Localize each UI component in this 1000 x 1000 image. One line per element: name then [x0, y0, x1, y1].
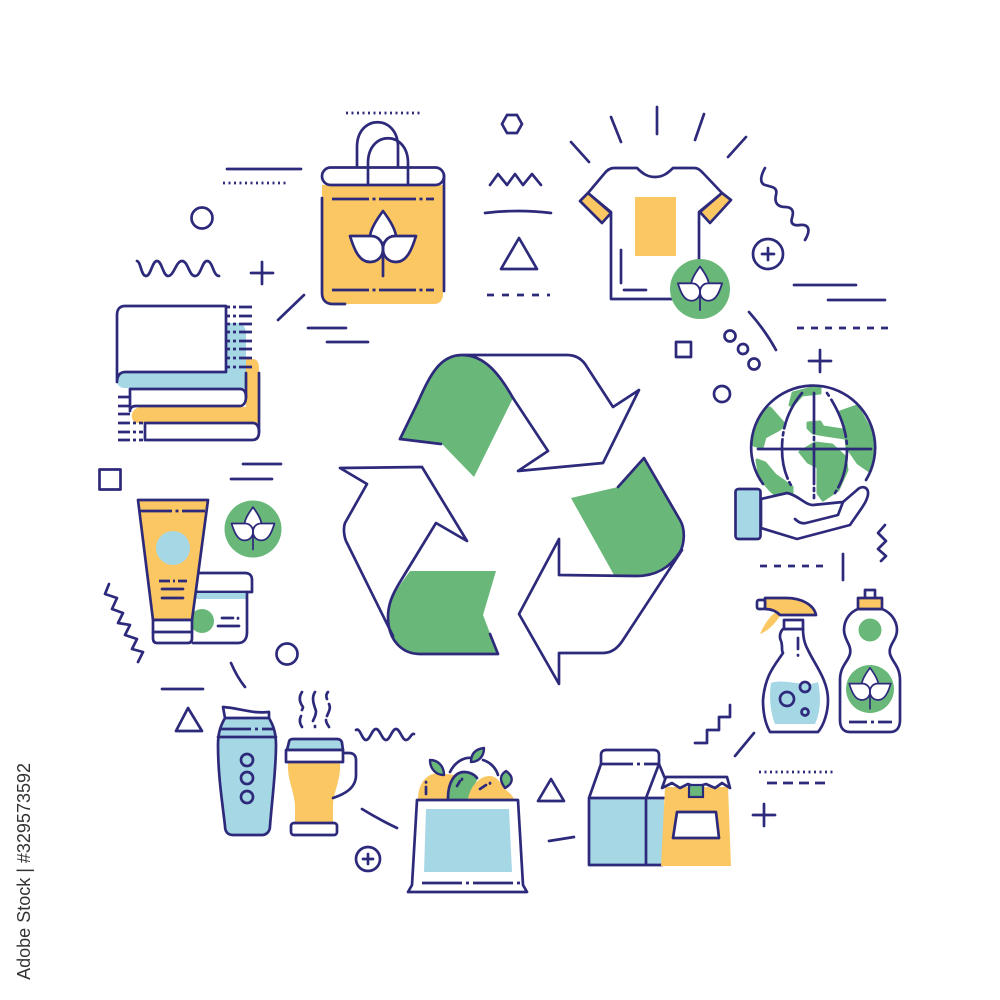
icon: globe held in hand	[736, 385, 880, 539]
icon: green leaf badge on shirt	[670, 259, 730, 319]
icon: dish soap bottle	[840, 590, 900, 732]
icon: t-shirt	[580, 168, 731, 319]
right-side squiggle and lines	[761, 168, 808, 240]
recycling symbol	[340, 355, 684, 684]
lower-left decorations	[356, 729, 414, 740]
icon: paper pouch	[661, 777, 731, 866]
decoration: geometric shapes and lines	[100, 113, 889, 871]
icon: stack of towels	[117, 306, 259, 440]
recycling arrow: top	[400, 355, 639, 477]
top-left lines	[346, 112, 422, 114]
tube	[138, 500, 208, 643]
zigzag and triangle column	[485, 174, 551, 269]
recycling arrow: left	[340, 467, 498, 654]
icon: leaf emblem on bag	[350, 211, 416, 276]
hexagon	[502, 115, 522, 133]
icon: spray bottle	[757, 598, 828, 732]
lower-right decorations	[695, 705, 730, 743]
stock id text: Adobe Stock | #329573592	[14, 763, 34, 980]
icon: travel tumbler	[218, 707, 276, 835]
icon: cosmetics tube and jar	[138, 500, 282, 643]
icon: mug with steam	[286, 692, 356, 835]
icon: shopping bag	[322, 122, 444, 304]
icon: milk carton	[589, 750, 666, 865]
jar	[190, 573, 252, 643]
icon: green leaf badge on cosmetics	[224, 500, 282, 558]
icon: grocery bag with fruit	[408, 748, 527, 892]
decoration: rays above shirt	[571, 107, 746, 162]
recycling arrow: right	[519, 458, 684, 684]
